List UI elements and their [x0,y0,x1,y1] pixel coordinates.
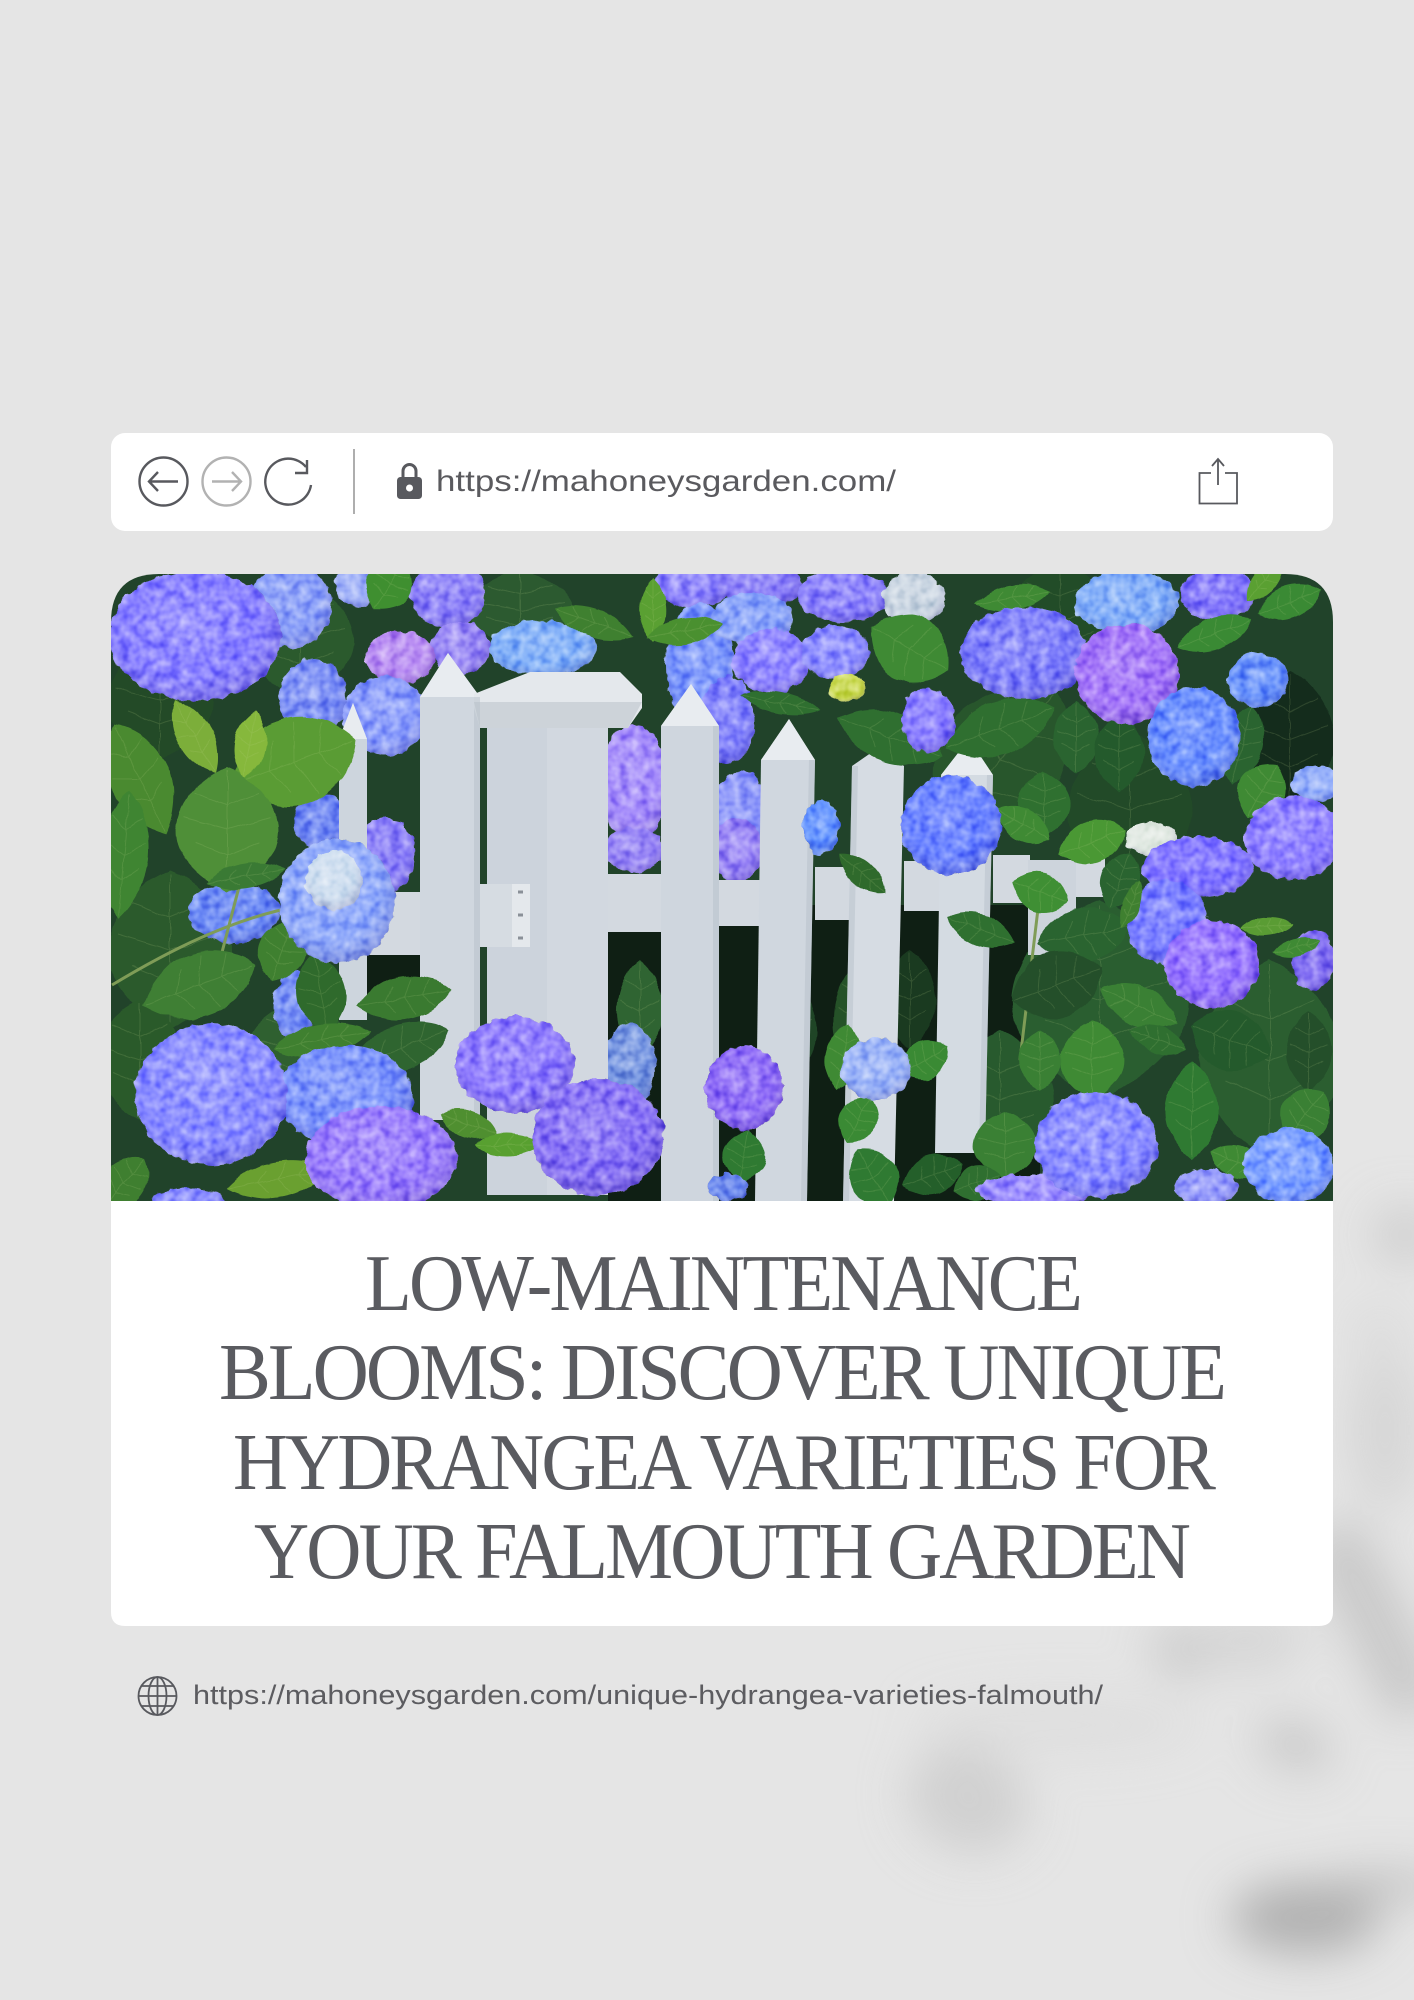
divider [353,449,355,514]
icon: forward arrow [202,458,250,506]
post [487,728,547,1195]
icon: back arrow [140,458,188,506]
browser address bar [111,433,1333,531]
title: HYDRANGEA VARIETIES FOR [233,1419,1216,1507]
icon: share [1200,459,1237,504]
foreground blooms [109,571,1343,1212]
background blooms behind fence [188,560,1256,1107]
picket fence [339,653,1105,1201]
background foliage [96,560,1341,1170]
title: LOW-MAINTENANCE [365,1240,1080,1328]
icon: reload [265,459,311,505]
content card [87,549,1343,1626]
picket shading [474,697,993,1201]
url text: https://mahoneysgarden.com/ [436,465,897,498]
card panel [111,1195,1333,1626]
icon: padlock [397,465,422,499]
stems [111,889,1039,1060]
dark gaps behind fence [367,905,1040,1201]
leaves over blooms [1120,880,1320,958]
title: BLOOMS: DISCOVER UNIQUE [219,1329,1224,1417]
title: YOUR FALMOUTH GARDEN [254,1508,1189,1596]
rail bracket [480,884,530,947]
foreground foliage [87,549,1343,1221]
post cap [474,672,642,728]
icon: globe [138,1677,176,1715]
article url: https://mahoneysgarden.com/unique-hydrangea-varieties-falmouth/ [193,1680,1104,1710]
picket tips [339,653,993,775]
pickets [339,703,367,1020]
source link [138,1677,1104,1715]
rails [339,855,1105,955]
blurred leaf shadows [890,1207,1414,1954]
photo: hydrangeas and white picket fence [87,549,1343,1221]
title [219,1240,1224,1596]
